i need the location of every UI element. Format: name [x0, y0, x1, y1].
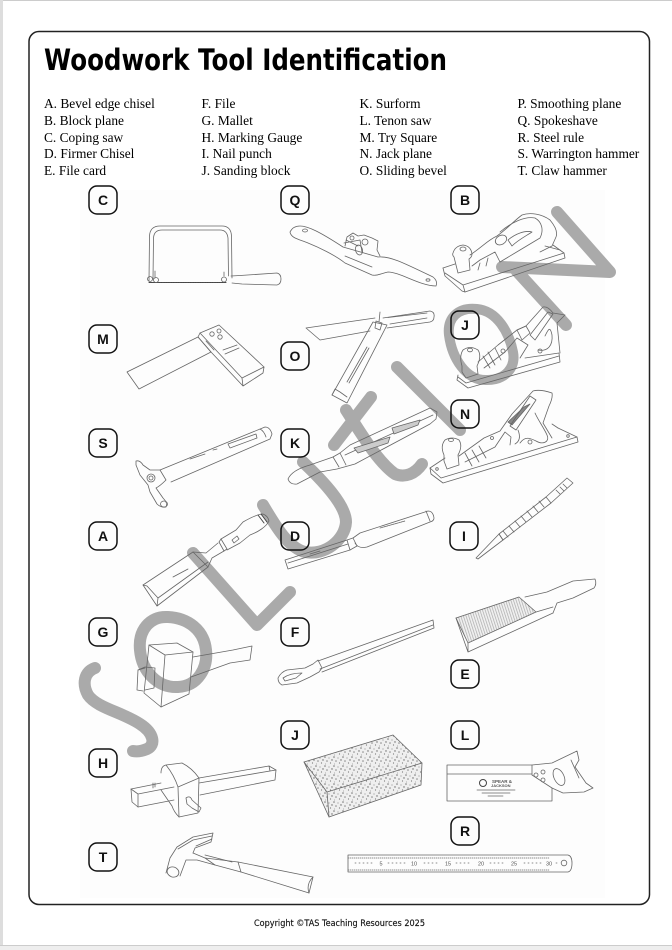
label badge: O: O	[290, 348, 301, 364]
label badge: M: M	[97, 331, 109, 347]
answer key list: D. Firmer Chisel	[44, 146, 135, 161]
label badge: N: N	[460, 406, 470, 422]
label badge: H: H	[98, 755, 108, 771]
label badge: E	[451, 660, 479, 688]
label badge: S	[89, 429, 117, 457]
label badge: O	[281, 342, 309, 370]
label badge: R: R	[460, 823, 470, 839]
answer key list: L. Tenon saw	[360, 113, 432, 128]
label badge: S: S	[98, 435, 108, 451]
label badge: K	[281, 429, 309, 457]
icon: spokeshave	[290, 226, 437, 286]
answer key list: G. Mallet	[202, 113, 253, 128]
answer key list: C. Coping saw	[44, 130, 124, 145]
label badge: D	[281, 522, 309, 550]
answer key list: J. Sanding block	[202, 163, 291, 178]
label badge: J (upper)	[451, 311, 479, 339]
icon: sliding bevel	[306, 311, 434, 403]
label badge: L	[451, 721, 479, 749]
label badge: I: I	[462, 528, 466, 544]
label badge: H	[89, 749, 117, 777]
label badge: L: L	[461, 727, 470, 743]
answer key list: O. Sliding bevel	[360, 163, 447, 178]
icon: tenon saw	[447, 751, 593, 801]
icon: coping saw	[148, 226, 281, 285]
icon: steel rule: 20	[478, 862, 484, 868]
icon: steel rule: 10	[411, 862, 417, 868]
icon: smoothing plane	[457, 307, 565, 388]
icon: marking gauge	[131, 763, 276, 817]
label badge: J (lower): J	[291, 727, 299, 743]
label badge: B: B	[460, 192, 470, 208]
label badge: N	[451, 400, 479, 428]
label badge: D: D	[290, 528, 300, 544]
icon: file	[278, 620, 434, 685]
label badge: G	[89, 618, 117, 646]
label badge: R	[451, 817, 479, 845]
label badge: I	[450, 522, 478, 550]
answer key list: N. Jack plane	[360, 146, 432, 161]
label badge: F: F	[291, 624, 300, 640]
label badge: M	[89, 325, 117, 353]
answer key list: F. File	[202, 96, 235, 111]
watermark: SOLUTION	[85, 212, 610, 751]
label badge: G: G	[98, 624, 109, 640]
answer key list	[44, 96, 640, 178]
label badge: C	[89, 186, 117, 214]
icon: file card	[456, 579, 596, 652]
title: Woodwork Tool Identification	[44, 43, 447, 77]
icon: block plane	[443, 214, 565, 292]
icon: mallet	[137, 643, 252, 707]
label badge: E: E	[460, 666, 470, 682]
faint artwork background	[80, 190, 605, 898]
answer key list: H. Marking Gauge	[202, 130, 302, 145]
icon: surform	[288, 408, 437, 484]
label badge: J (upper): J	[461, 317, 469, 333]
answer key list: K. Surform	[360, 96, 421, 111]
icon: try square	[127, 325, 264, 389]
icon: steel rule	[348, 855, 572, 872]
answer key list: S. Warrington hammer	[518, 146, 640, 161]
answer key list: E. File card	[44, 163, 106, 178]
label badge: J (lower)	[281, 721, 309, 749]
answer key list: T. Claw hammer	[518, 163, 607, 178]
label badge: K: K	[290, 435, 300, 451]
label badge: T	[89, 843, 117, 871]
label badge: Q: Q	[290, 192, 301, 208]
answer key list: P. Smoothing plane	[518, 96, 621, 111]
answer key list: A. Bevel edge chisel	[44, 96, 155, 111]
answer key list: M. Try Square	[360, 130, 437, 145]
icon: bevel edge chisel	[143, 514, 269, 606]
icon: steel rule: 30	[546, 862, 552, 868]
label badge: B	[451, 186, 479, 214]
icon: steel rule: 25	[511, 862, 517, 868]
label badge: T: T	[99, 849, 108, 865]
answer key list: Q. Spokeshave	[518, 113, 598, 128]
icon: warrington hammer	[136, 427, 272, 507]
icon: sanding block	[304, 735, 422, 817]
answer key list: B. Block plane	[44, 113, 124, 128]
icon: tenon saw: JACKSON	[491, 783, 511, 788]
icon: claw hammer	[166, 833, 313, 893]
icon: jack plane	[430, 390, 578, 483]
label badge: Q	[281, 186, 309, 214]
answer key list: R. Steel rule	[518, 130, 584, 145]
icon: steel rule: 5	[379, 862, 383, 868]
icon: firmer chisel	[285, 511, 434, 569]
icon: steel rule: 15	[445, 862, 451, 868]
label badge: A: A	[98, 528, 108, 544]
icon: nail punch	[476, 478, 573, 559]
icon: tenon saw: SPEAR &	[492, 779, 513, 784]
label badge: A	[89, 522, 117, 550]
label badge: C: C	[98, 192, 108, 208]
label badge: F	[281, 618, 309, 646]
copyright footer: Copyright ©TAS Teaching Resources 2025	[254, 919, 425, 929]
answer key list: I. Nail punch	[202, 146, 272, 161]
